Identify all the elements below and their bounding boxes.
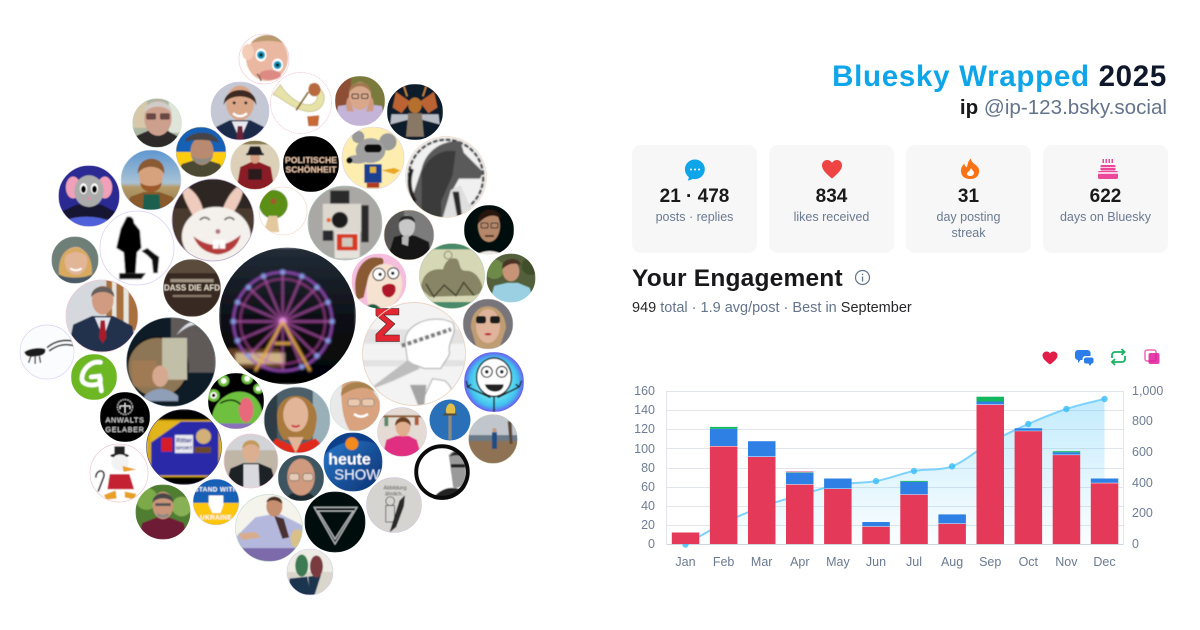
avatar: man in suit xyxy=(211,82,269,140)
avatar: golden horn xyxy=(270,72,332,134)
cumulative area xyxy=(686,399,1104,544)
avatar: screaming cartoon woman xyxy=(352,254,406,308)
stat card: posts and replies xyxy=(632,145,757,253)
avatar: green monster xyxy=(207,373,264,429)
avatar: beefeater guard xyxy=(230,140,280,190)
avatar: cockroach drawing xyxy=(20,325,74,379)
heading: Your Engagement: Your Engagement xyxy=(632,265,843,292)
icon: likes legend xyxy=(1042,352,1058,364)
avatar bubble pack xyxy=(20,34,539,595)
avatar: Politische Schönheit logo: POLITISCHE xyxy=(285,155,337,165)
icon: speech bubble xyxy=(685,159,705,180)
avatar: ferris wheel at night xyxy=(219,248,356,384)
right axis labels xyxy=(1132,384,1163,551)
month labels: Oct xyxy=(1019,555,1039,569)
avatar: woman in pink in kitchen xyxy=(378,408,426,456)
avatar: green G logo xyxy=(71,354,117,400)
avatar: man in round portal over moon xyxy=(126,318,216,406)
left axis labels: 60 xyxy=(641,480,655,494)
left axis labels: 100 xyxy=(634,442,655,456)
avatar: dark fantasy creature xyxy=(387,84,443,140)
avatar: man in black and white xyxy=(384,210,434,260)
avatar: man in maroon shirt xyxy=(136,484,192,540)
avatar: pen sketch note: Abbildung xyxy=(383,486,407,492)
avatar: red bearded man xyxy=(121,150,181,210)
avatar: silhouette with dog xyxy=(100,211,174,285)
avatar: black ring portrait xyxy=(414,444,470,500)
stacked bar and line chart xyxy=(634,384,1163,569)
avatar: chocolate bar xyxy=(146,410,222,484)
right axis labels: 400 xyxy=(1132,476,1153,490)
title: Bluesky Wrapped 2025 xyxy=(832,60,1167,93)
avatar: smiling white rabbit xyxy=(172,179,254,266)
avatar: Anwalts Gelaber logo: ANWALTS xyxy=(105,416,145,424)
avatar: drawing on green wall xyxy=(420,244,484,308)
avatar: cool mouse on yellow xyxy=(342,127,404,189)
month labels: Nov xyxy=(1055,555,1078,569)
icon: quotes legend xyxy=(1145,350,1160,364)
left axis labels: 140 xyxy=(634,403,655,417)
stat card: day posting streak: day posting xyxy=(937,210,1001,224)
monthly bars xyxy=(672,397,1118,544)
icon: replies legend xyxy=(1075,350,1094,366)
right axis labels: 1,000 xyxy=(1132,384,1163,398)
avatar: Sigma laurel statue: Σ xyxy=(372,300,403,353)
left axis labels: 80 xyxy=(641,461,655,475)
avatar: Anwalts Gelaber logo xyxy=(100,392,150,442)
avatar: chocolate bar: SPORT xyxy=(176,445,192,451)
avatar: woman with sunglasses xyxy=(463,299,513,349)
stat card: days on Bluesky xyxy=(1043,145,1168,253)
avatar: Stand with Ukraine badge: STAND WITH xyxy=(194,486,238,493)
stat card: day posting streak: 31 xyxy=(958,186,979,207)
handle line: ip @ip-123.bsky.social xyxy=(960,96,1167,119)
chart legend icons xyxy=(1042,349,1160,366)
engagement summary: 949 total · 1.9 avg/post · Best in September xyxy=(632,300,912,316)
stat card: days on Bluesky: 622 xyxy=(1090,186,1121,207)
stat card: posts and replies: 21 · 478 xyxy=(660,186,729,207)
avatar: Politische Schönheit logo xyxy=(283,136,339,192)
month labels: Sep xyxy=(979,555,1001,569)
avatar: chocolate bar: Ritter xyxy=(176,438,192,444)
avatar: man in brown field xyxy=(468,414,518,464)
avatar: man with glasses, close up xyxy=(330,379,380,431)
stat card: days on Bluesky: days on Bluesky xyxy=(1060,210,1152,224)
avatar: heute show logo: SHOW xyxy=(334,468,380,484)
avatar: blonde woman xyxy=(52,236,98,284)
avatar: man in light blue t-shirt xyxy=(485,254,539,302)
avatar: Stand with Ukraine badge: UKRAINE xyxy=(200,514,232,521)
avatar: reclining man xyxy=(236,494,304,562)
month labels: May xyxy=(826,555,850,569)
icon: flame xyxy=(961,158,979,179)
stat card: posts and replies: posts · replies xyxy=(656,210,733,224)
left axis labels: 40 xyxy=(641,499,655,513)
avatar: Politische Schönheit logo: SCHÖNHEIT xyxy=(285,164,337,174)
avatar: older man with glasses xyxy=(132,98,183,148)
avatar: engraved wolf xyxy=(406,136,486,218)
avatar: man with cap on Ukraine flag xyxy=(176,127,226,177)
avatar: Scrooge McDuck xyxy=(90,444,148,502)
left axis labels: 0 xyxy=(648,537,655,551)
avatar: man resting head on hands xyxy=(335,76,385,126)
icon: cake xyxy=(1098,159,1118,179)
month labels: Apr xyxy=(790,555,810,569)
avatar: heute show logo: heute xyxy=(328,451,371,468)
month labels: Feb xyxy=(713,555,734,569)
left axis labels: 120 xyxy=(634,422,655,436)
stat card: day posting streak: streak xyxy=(951,226,986,240)
avatar: dark wall slogan: DASS DIE AFD xyxy=(164,283,220,292)
avatar: pen sketch note: ähnlich. xyxy=(385,492,403,498)
avatar: Sigma laurel statue xyxy=(362,300,466,406)
right axis labels: 800 xyxy=(1132,414,1153,428)
stat card: likes received xyxy=(769,145,894,253)
avatar: bald man with glasses xyxy=(278,455,324,501)
avatar: man with glasses on black xyxy=(464,205,514,255)
month labels: Jun xyxy=(866,555,886,569)
stat card: likes received: 834 xyxy=(816,186,848,207)
avatar: shoes on feet xyxy=(287,549,333,595)
left axis labels xyxy=(634,384,655,551)
chart grid xyxy=(666,391,1124,544)
avatar: polaroid camera xyxy=(308,186,382,260)
left axis labels: 20 xyxy=(641,518,655,532)
avatar: man in suit with red tie xyxy=(66,280,138,352)
avatar: golden statue on blue sky xyxy=(430,400,470,440)
avatar: Anwalts Gelaber logo: GELABER xyxy=(105,425,145,434)
avatar: cartoon tree xyxy=(259,187,307,235)
month labels xyxy=(675,555,1116,569)
avatar: blond young man xyxy=(224,434,278,488)
avatar: cartoon mouse in uniform xyxy=(58,166,120,226)
avatar: pen sketch note xyxy=(366,478,422,532)
stat card: day posting streak xyxy=(906,145,1031,253)
avatar: black triangle logo xyxy=(304,492,366,552)
month labels: Dec xyxy=(1093,555,1116,569)
avatar: heute show logo xyxy=(324,432,382,492)
stat card: likes received: likes received xyxy=(794,210,869,224)
icon: info xyxy=(856,270,870,284)
avatar: woman in red xyxy=(264,387,330,453)
cumulative line xyxy=(682,396,1108,548)
month labels: Jul xyxy=(906,555,922,569)
right axis labels: 200 xyxy=(1132,506,1153,520)
right axis labels: 0 xyxy=(1132,537,1139,551)
month labels: Jan xyxy=(675,555,696,569)
month labels: Aug xyxy=(941,555,963,569)
month labels: Mar xyxy=(751,555,772,569)
icon: reposts legend xyxy=(1112,349,1125,365)
avatar: Stand with Ukraine badge xyxy=(193,479,239,525)
avatar: dark wall slogan xyxy=(164,260,220,316)
right axis labels: 600 xyxy=(1132,445,1153,459)
left axis labels: 160 xyxy=(634,384,655,398)
icon: heart xyxy=(822,160,842,178)
avatar: stick figure xyxy=(464,352,524,412)
avatar: cartoon baby xyxy=(239,34,289,84)
